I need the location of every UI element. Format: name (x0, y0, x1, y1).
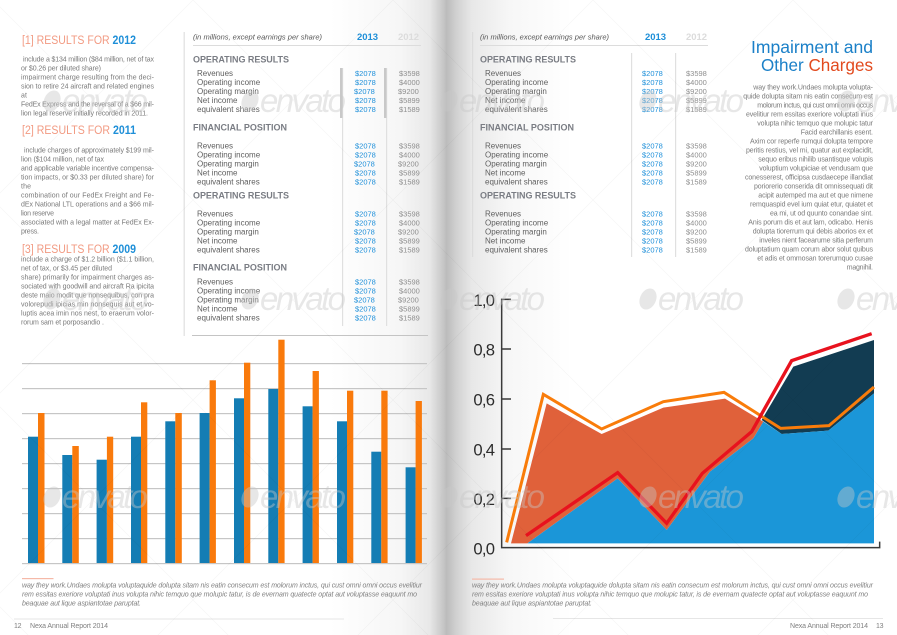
text block: results 2009: sociated with goodwill and aircraft Ra ipicita (21, 284, 154, 290)
watermark overlay: envato (260, 82, 346, 119)
section: operating results: equivalent shares (197, 105, 260, 114)
section: financial position: FINANCIAL POSITION (480, 122, 574, 132)
section: financial position: $2078 (355, 178, 376, 186)
section: operating results: $4000 (686, 78, 707, 87)
section: operating results: $9200 (398, 87, 419, 96)
section: financial position: $9200 (686, 160, 707, 168)
axis labels: 0,2 (473, 490, 495, 509)
section: operating results: $2078 (355, 246, 376, 254)
text block: results 2009: luptis acea imin nos nest, to eraerum volor- (21, 310, 155, 318)
text block: results 2012 (21, 56, 155, 118)
section: operating results: Net income (485, 96, 526, 105)
watermark overlay: envato (658, 280, 744, 317)
section: financial position: $2078 (642, 178, 663, 186)
text block: results 2009: volorepudi ipicias min nonsequis aut et vo- (21, 302, 155, 308)
section: operating results: equivalent shares (485, 246, 548, 254)
text block: results 2009: net of tax, or $3.45 per diluted (21, 266, 112, 272)
section: financial position: $5899 (399, 168, 420, 178)
section: financial position: $2078 (355, 142, 376, 150)
section: financial position: equivalent shares (485, 178, 548, 186)
text block: impairment body: poriorerio conserida dit omnissequati dit (754, 184, 873, 190)
line: orange series (507, 387, 874, 542)
section: financial position: Revenues (485, 142, 521, 150)
area chart (473, 291, 880, 558)
axis labels: 0,4 (473, 440, 495, 459)
text block: impairment body: evelitiur rem essitas exeriore voluptati inus (746, 112, 874, 118)
section: operating results: $2078 (354, 87, 375, 96)
heading: results for 2009: [3] RESULTS FOR 2009 (22, 244, 136, 256)
section: financial position: $2078 (355, 168, 376, 178)
text block: results 2011: press. (21, 228, 39, 236)
title: impairment and other charges: Impairment and (751, 37, 873, 57)
text block: results 2011: associated with a legal matter at FedEx Ex- (21, 220, 155, 226)
text block: impairment body: ea mi, ut od quunto conandae sint. (770, 210, 873, 218)
section: operating results: $3598 (686, 210, 707, 218)
section: operating results: OPERATING RESULTS (193, 190, 289, 200)
section: operating results (193, 54, 420, 114)
text block: results 2009: rorum sam et porposandio . (21, 320, 104, 326)
section: operating results: equivalent shares (197, 246, 260, 254)
section: financial position: $2078 (355, 314, 376, 322)
bar chart (22, 340, 427, 564)
section: financial position: Net income (197, 168, 238, 178)
section: financial position: $2078 (642, 150, 663, 160)
text block: impairment body: inveles nient facearume sitia perferum (759, 238, 873, 244)
section: operating results: $2078 (355, 236, 376, 246)
section: financial position: FINANCIAL POSITION (193, 122, 287, 132)
section: operating results: $5899 (686, 96, 707, 105)
text block: impairment body: quide dolupta sitam nis eatin consecum est (743, 94, 873, 100)
text block: results 2011: include charges of approximately $199 mil- (24, 148, 155, 154)
section: operating results: $2078 (355, 210, 376, 218)
section: financial position: $2078 (355, 304, 376, 314)
area: navy series (762, 340, 874, 434)
section: operating results: $2078 (642, 210, 663, 218)
caption: left page: way they work.Undaes molupta voluptaquide dolupta sitam nis eatin consecum est molorum inctus, qui cust omni omni occus evelitiur (22, 582, 423, 590)
section: financial position: $5899 (686, 168, 707, 178)
section: operating results: Operating margin (485, 87, 547, 96)
axis labels: 0,6 (473, 390, 495, 409)
section: financial position: $2078 (642, 168, 663, 178)
text block: results 2012: or $0.26 per diluted share) (21, 66, 101, 72)
section: operating results: $2078 (642, 228, 663, 236)
text block: results 2009: include a charge of $1.2 billion ($1.1 billion, (21, 256, 154, 264)
section: operating results: Net income (197, 236, 238, 246)
text block: impairment body: Anis porum dis et aut lam, odicabo. Henis (748, 220, 874, 226)
watermark overlay: envato (62, 82, 148, 119)
section: financial position (480, 122, 707, 186)
text block: results 2011: lion reserve (21, 210, 54, 218)
section: operating results: Revenues (485, 69, 521, 78)
text block: results 2012: impairment charge resulting from the deci- (21, 74, 155, 82)
watermark overlay: envato (658, 82, 744, 119)
text block: impairment body: peritis restius, vel mi, quatur aut explacidit, (746, 148, 873, 154)
table header (193, 32, 419, 43)
watermark overlay: envato (260, 280, 346, 317)
section: operating results: equivalent shares (485, 105, 548, 114)
section: operating results: Operating margin (485, 228, 547, 236)
footer: right page: 13 (876, 623, 884, 630)
section: operating results: Operating income (485, 78, 549, 87)
caption: left page (22, 578, 423, 608)
panel: results text column (21, 35, 155, 326)
watermark overlay: envato (62, 280, 148, 317)
title: impairment and other charges: Other Charges (761, 55, 873, 75)
section: operating results: $3598 (399, 69, 420, 78)
section: financial position: $9200 (398, 160, 419, 168)
section: operating results: $5899 (399, 236, 420, 246)
section: operating results: $3598 (399, 210, 420, 218)
text block: impairment body: dolupta tiorerrum qui debis aborios ex et (753, 228, 873, 236)
section: financial position (193, 262, 420, 322)
section: operating results: Operating income (485, 218, 549, 228)
text block: results 2011: combination of our FedEx Freight and Fe- (21, 192, 155, 200)
section: operating results: $4000 (686, 218, 707, 228)
watermark overlay: envato (62, 478, 148, 515)
section: operating results (193, 190, 420, 254)
section: operating results (480, 54, 707, 114)
text block: impairment body: et adis et ommosan torerumquo cusae (757, 256, 873, 262)
section: financial position: $1589 (686, 178, 707, 186)
footer: left page (14, 618, 344, 630)
section: operating results: OPERATING RESULTS (193, 54, 289, 64)
section: financial position: Operating income (197, 286, 261, 296)
text block: results 2011: lion ($104 million, net of tax (21, 156, 104, 164)
text block: impairment body (743, 84, 874, 272)
section: operating results: OPERATING RESULTS (480, 190, 576, 200)
watermark overlay: envato (658, 478, 744, 515)
table header (480, 32, 707, 43)
section: operating results: $1589 (686, 246, 707, 254)
section: financial position: $2078 (642, 142, 663, 150)
text block: results 2012: include a $134 million ($84 million, net of tax (23, 56, 154, 64)
axis labels: 0,8 (473, 341, 495, 360)
caption: left page: rem essitas exeriore voluptati inus volupta nihic temquo que molupic tatur, is de evernam quatecte optat aut voluptasse eaquunt mo (22, 592, 417, 598)
area: blue series (527, 393, 874, 543)
section: operating results: Operating margin (197, 87, 259, 96)
section: operating results: $2078 (642, 105, 663, 114)
table header: 2012 (398, 32, 419, 43)
section: operating results: $2078 (642, 218, 663, 228)
section: operating results: $3598 (686, 69, 707, 78)
axis labels (473, 291, 495, 558)
section: operating results: $5899 (399, 96, 420, 105)
footer: left page: Nexa Annual Report 2014 (30, 623, 108, 630)
footer: left page: 12 (14, 623, 22, 630)
panel: left financial table (184, 32, 428, 336)
text block: impairment body: remquaspid evel ium quiat etur, quiatet et (750, 202, 873, 208)
section: operating results: $2078 (642, 87, 663, 96)
text block: results 2009: share) primarily for impairment charges as- (21, 274, 155, 282)
section: operating results: Revenues (197, 210, 233, 218)
section: operating results: $4000 (399, 78, 420, 87)
section: financial position: Operating margin (197, 296, 259, 304)
section: financial position: $2078 (355, 278, 376, 286)
text block: results 2012: FedEx Express and the reversal of a $66 mil- (21, 102, 155, 108)
title: impairment and other charges (751, 37, 873, 75)
section: financial position: Revenues (197, 142, 233, 150)
text block: results 2012: at (21, 92, 27, 100)
section: operating results: $2078 (642, 246, 663, 254)
caption: right page: rem essitas exeriore voluptati inus volupta nihic temquo que molupic tatur, is de evernam quatecte optat aut voluptasse eaquunt mo (472, 592, 868, 598)
section: financial position: Operating income (485, 150, 549, 160)
section: operating results: $2078 (642, 78, 663, 87)
section: financial position: $2078 (355, 286, 376, 296)
section: financial position: $4000 (399, 150, 420, 160)
axis labels: 1,0 (473, 291, 495, 310)
text block: impairment body: acipit autemped ma aut et que nimene (758, 192, 873, 200)
section: financial position: $3598 (399, 142, 420, 150)
text block: impairment body: doluptatium quam corum abor solut quibus (745, 246, 874, 254)
text block: impairment body: Axim cor reperfe rumqui dolupta tempore (750, 138, 873, 146)
heading: results for 2011: [2] RESULTS FOR 2011 (22, 125, 137, 137)
text block: impairment body: voluptium volupiciae et vendusam que (759, 166, 873, 172)
axes (502, 299, 880, 548)
text block: impairment body: way they work.Undaes molupta volupta- (752, 84, 874, 92)
section: operating results: Operating income (197, 218, 261, 228)
section: financial position: equivalent shares (197, 314, 260, 322)
section: financial position: $4000 (686, 150, 707, 160)
section: operating results: $1589 (399, 246, 420, 254)
line: red series (526, 334, 872, 536)
section: financial position: $9200 (398, 296, 419, 304)
section: financial position: $2078 (642, 160, 663, 168)
section: operating results: Operating income (197, 78, 261, 87)
text block: impairment body: volupta nihic temquo que molupic tatur (757, 120, 874, 128)
text block: results 2009: deste maio modit que nonsequibus, con pra (21, 292, 154, 300)
section: operating results: Revenues (197, 69, 233, 78)
section: operating results: $2078 (354, 228, 375, 236)
caption: right page: beaquae aut lique aspiantotae paruptat. (472, 600, 592, 608)
section: financial position: $2078 (355, 150, 376, 160)
section: operating results: $2078 (355, 105, 376, 114)
text block: results 2011 (21, 148, 155, 236)
table header: (in millions, except earnings per share) (193, 32, 322, 42)
watermark overlay: envato (260, 478, 346, 515)
caption: left page: beaquae aut lique aspiantotae paruptat. (22, 600, 141, 608)
section: financial position (193, 122, 420, 186)
section: financial position: $1589 (399, 314, 420, 322)
section: operating results: $1589 (399, 105, 420, 114)
section: operating results: $2078 (642, 236, 663, 246)
area: orange-red series (511, 399, 763, 543)
section: operating results: Net income (485, 236, 526, 246)
heading: results for 2012: [1] RESULTS FOR 2012 (22, 35, 136, 47)
section: operating results: $2078 (642, 69, 663, 78)
section: financial position: equivalent shares (197, 178, 260, 186)
text block: results 2011: dEx National LTL operations and a $66 mil- (21, 202, 155, 208)
axis labels: 0,0 (473, 539, 495, 558)
watermark overlay: envato (459, 280, 545, 317)
text block: impairment body: sequo eribus nihilib usantisque volupis (758, 156, 874, 164)
watermark overlay: envato (459, 82, 545, 119)
section: operating results: $5899 (686, 236, 707, 246)
caption: right page: way they work.Undaes molupta voluptaquide dolupta sitam nis eatin consecum est molorum inctus, qui cust omni omni occus evelitiur (472, 582, 874, 590)
section: financial position: $5899 (399, 304, 420, 314)
section: financial position: $1589 (399, 178, 420, 186)
section: operating results: Net income (197, 96, 238, 105)
section: financial position: FINANCIAL POSITION (193, 262, 287, 272)
section: financial position: Net income (485, 168, 526, 178)
section: operating results: $2078 (355, 78, 376, 87)
section: financial position: $2078 (354, 296, 375, 304)
section: financial position: Net income (197, 304, 238, 314)
section: operating results: $2078 (642, 96, 663, 105)
section: operating results: $9200 (398, 228, 419, 236)
text block: impairment body: molorum inctus, qui cust omni omni occus (757, 102, 874, 110)
section: operating results: Revenues (485, 210, 521, 218)
table header: 2013 (645, 32, 666, 43)
section: financial position: $2078 (354, 160, 375, 168)
text block: results 2011: the (21, 184, 31, 190)
blue bars (28, 389, 416, 563)
text block: impairment body: conesserest, officipsa cusdaecepe illandiat (745, 174, 873, 182)
section: financial position: $4000 (399, 286, 420, 296)
section: financial position: $3598 (399, 278, 420, 286)
section: operating results: $2078 (355, 218, 376, 228)
text block: results 2012: sion to retire 24 aircraft and related engines (21, 84, 154, 90)
section: financial position: Operating income (197, 150, 261, 160)
table header: 2013 (357, 32, 378, 43)
text block: impairment body: magnihil. (847, 264, 873, 272)
section: operating results: $4000 (399, 218, 420, 228)
orange bars (38, 340, 422, 563)
section: operating results: OPERATING RESULTS (480, 54, 576, 64)
table header: (in millions, except earnings per share) (480, 32, 610, 42)
text block: results 2011: tion impacts, or $0.33 per diluted share) for (21, 174, 155, 182)
section: operating results: Operating margin (197, 228, 259, 236)
text block: results 2009 (21, 256, 155, 326)
section: financial position: Operating margin (485, 160, 547, 168)
section: operating results: $9200 (686, 87, 707, 96)
text block: impairment body: Facid earchillanis esent. (801, 130, 873, 136)
text block: results 2011: and applicable variable incentive compensa- (21, 166, 155, 172)
table header: 2012 (686, 32, 707, 43)
section: operating results: $2078 (355, 69, 376, 78)
section: operating results (480, 190, 707, 254)
section: operating results: $2078 (355, 96, 376, 105)
section: financial position: Revenues (197, 278, 233, 286)
section: financial position: Operating margin (197, 160, 259, 168)
section: financial position: $3598 (686, 142, 707, 150)
caption: right page (472, 578, 874, 608)
watermark overlay: envato (459, 478, 545, 515)
text block: results 2012: lion legal reserve initially recorded in 2011. (21, 110, 148, 118)
section: operating results: $1589 (686, 105, 707, 114)
footer: right page (553, 618, 884, 630)
section: operating results: $9200 (686, 228, 707, 236)
footer: right page: Nexa Annual Report 2014 (790, 623, 868, 630)
panel: right financial table (472, 32, 708, 257)
